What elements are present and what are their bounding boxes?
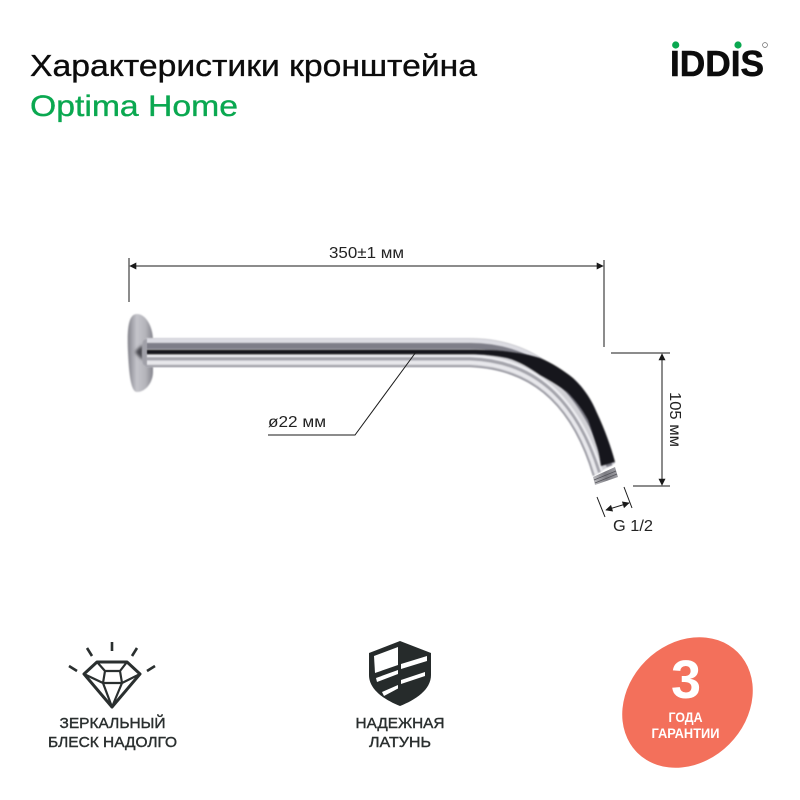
flange collar — [142, 338, 147, 367]
pipe white highlight — [146, 356, 601, 471]
pipe lower edge — [146, 366, 594, 476]
dimension: diameter 22 — [268, 352, 416, 435]
badge: 3 year warranty: ГАРАНТИИ — [652, 726, 720, 741]
dimension: length 350 — [129, 245, 604, 347]
dimension: thread G 1/2 — [597, 487, 653, 535]
subtitle: product line: Optima Home — [30, 90, 238, 123]
pipe dark reflection — [146, 350, 615, 466]
flange centre shadow — [135, 345, 143, 360]
badge: 3 year warranty: ГОДА — [668, 710, 703, 725]
badge: 3 year warranty — [596, 611, 779, 794]
dimension: diameter 22: ø22 мм — [268, 414, 326, 431]
title: Характеристики кронштейна — [30, 49, 477, 83]
pipe upper shade — [146, 346, 610, 466]
flange — [128, 314, 153, 392]
pipe mid shade — [146, 359, 599, 472]
icon: diamond — [69, 642, 155, 707]
pipe upper sheen — [146, 341, 613, 464]
feature label: reliable brass — [356, 715, 444, 751]
pipe lower highlight — [146, 363, 596, 474]
feature label: mirror shine: ЗЕРКАЛЬНЫЙ — [60, 714, 166, 732]
feature label: mirror shine — [48, 714, 177, 751]
feature label: reliable brass: ЛАТУНЬ — [369, 734, 431, 751]
product: shower arm — [128, 314, 618, 485]
badge: 3 year warranty: 3 — [671, 650, 701, 710]
icon: shield — [369, 641, 431, 706]
pipe body — [146, 338, 615, 476]
dimension: height 105 — [611, 353, 683, 486]
dimension: height 105: 105 мм — [666, 392, 683, 447]
logo: IDDIS: IDDIS — [670, 43, 764, 84]
feature label: reliable brass: НАДЕЖНАЯ — [356, 715, 444, 732]
feature label: mirror shine: БЛЕСК НАДОЛГО — [48, 734, 177, 751]
dimension: length 350: 350±1 мм — [329, 245, 404, 262]
threaded end — [593, 467, 618, 485]
dimension: thread G 1/2: G 1/2 — [613, 518, 653, 535]
